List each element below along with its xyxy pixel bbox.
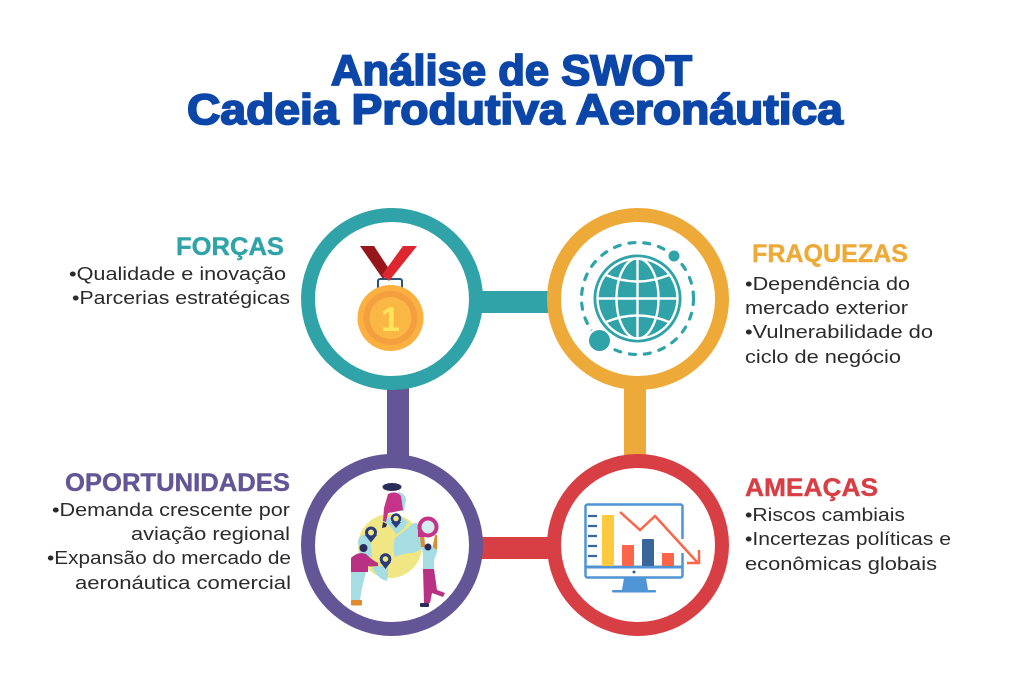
text: oportunidades list: aviação regional [131,524,290,544]
panel: oportunidades [47,461,476,629]
text: fraquezas list: •Dependência do [745,274,910,294]
text: forças list: •Parcerias estratégicas [72,288,290,308]
text: oportunidades list [47,500,291,593]
heading: oportunidades: OPORTUNIDADES [65,469,290,497]
heading: forças: FORÇAS [176,233,284,261]
text: ameaças list [745,505,951,574]
ring: forças [308,215,476,383]
icon: medal [358,246,424,351]
ring: oportunidades [308,461,476,629]
title: Análise de SWOT [331,47,692,95]
figure: person holding pin [420,535,445,607]
icon: medal: 1 [381,301,400,339]
connector: forças to fraquezas [475,291,555,313]
text: fraquezas list [745,274,933,367]
connector: forças to oportunidades [387,380,409,465]
text: ameaças list: econômicas globais [745,554,937,574]
title [187,47,844,134]
icon: monitor with falling chart [585,504,699,592]
text: ameaças list: •Incertezas políticas e [745,529,951,549]
panel: fraquezas [554,215,933,383]
heading: ameaças: AMEAÇAS [745,474,878,502]
icon: people around globe [351,483,445,607]
heading: fraquezas: FRAQUEZAS [752,240,908,268]
icon: globe with orbit [582,242,694,354]
text: fraquezas list: ciclo de negócio [745,347,901,367]
panel: ameaças [554,461,951,629]
text: fraquezas list: mercado exterior [745,298,908,318]
text: oportunidades list: •Demanda crescente por [52,500,290,520]
text: forças list [69,264,290,308]
globe [358,514,422,581]
title: Cadeia Produtiva Aeronáutica [187,86,844,134]
ring: ameaças [554,461,722,629]
ring: fraquezas [554,215,722,383]
text: fraquezas list: •Vulnerabilidade do [745,322,933,342]
figure: man on left [351,544,378,606]
connector: fraquezas to ameaças [624,380,646,465]
panel: forças [69,215,476,383]
text: oportunidades list: aeronáutica comercial [75,573,291,593]
figure: sitting woman [382,483,406,528]
connector: oportunidades to ameaças [475,537,555,559]
icon: map pins [365,514,436,569]
text: oportunidades list: •Expansão do mercado de [47,548,291,568]
text: ameaças list: •Riscos cambiais [745,505,905,525]
text: forças list: •Qualidade e inovação [69,264,286,284]
